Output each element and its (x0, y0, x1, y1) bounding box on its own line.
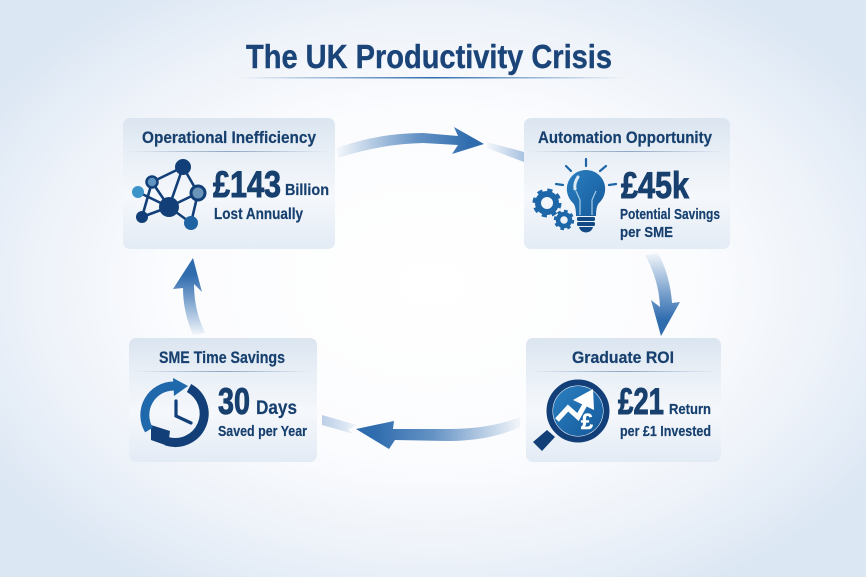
panel: graduate ROI (526, 338, 721, 462)
heading: SME time savings: SME Time Savings (159, 349, 285, 367)
icon: network (132, 159, 205, 230)
stat: 30 days: Days (256, 397, 297, 419)
stat: 21 return: per £1 Invested (620, 423, 711, 440)
panel: SME time savings (129, 338, 317, 462)
stat: 143 billion: Lost Annually (214, 206, 303, 223)
stat: 45k savings: £45k (621, 165, 689, 206)
stat: 21 return (618, 381, 711, 440)
stat: 45k savings: per SME (620, 224, 673, 241)
stat: 143 billion: Billion (285, 182, 329, 199)
panel: operational inefficiency (123, 118, 335, 249)
stat: 21 return: £21 (618, 381, 664, 422)
icon: magnifier with growth chart (533, 382, 606, 451)
arrow: automation to graduate ROI (645, 253, 680, 336)
stat: 30 days: 30 (218, 381, 250, 422)
heading: automation opportunity: Automation Opportunity (538, 129, 713, 147)
icon: gears and light bulb (534, 159, 616, 232)
title: The UK Productivity Crisis (246, 38, 612, 75)
icon: clock with cycle arrows (145, 378, 204, 446)
stat: 143 billion (213, 164, 329, 223)
stat: 45k savings (620, 165, 720, 241)
arrow: graduate ROI to time savings (322, 415, 520, 449)
stat: 30 days (218, 381, 307, 440)
stat: 30 days: Saved per Year (218, 423, 307, 440)
stat: 21 return: Return (669, 401, 711, 418)
icon: magnifier with growth chart: £ (581, 409, 594, 434)
heading: graduate ROI: Graduate ROI (572, 349, 674, 367)
stat: 45k savings: Potential Savings (620, 206, 720, 223)
panel: automation opportunity (524, 118, 730, 249)
stat: 143 billion: £143 (213, 164, 281, 205)
heading: operational inefficiency: Operational Inefficiency (142, 129, 317, 147)
arrow: inefficiency to automation (337, 127, 524, 162)
arrow: time savings to inefficiency (173, 258, 205, 335)
